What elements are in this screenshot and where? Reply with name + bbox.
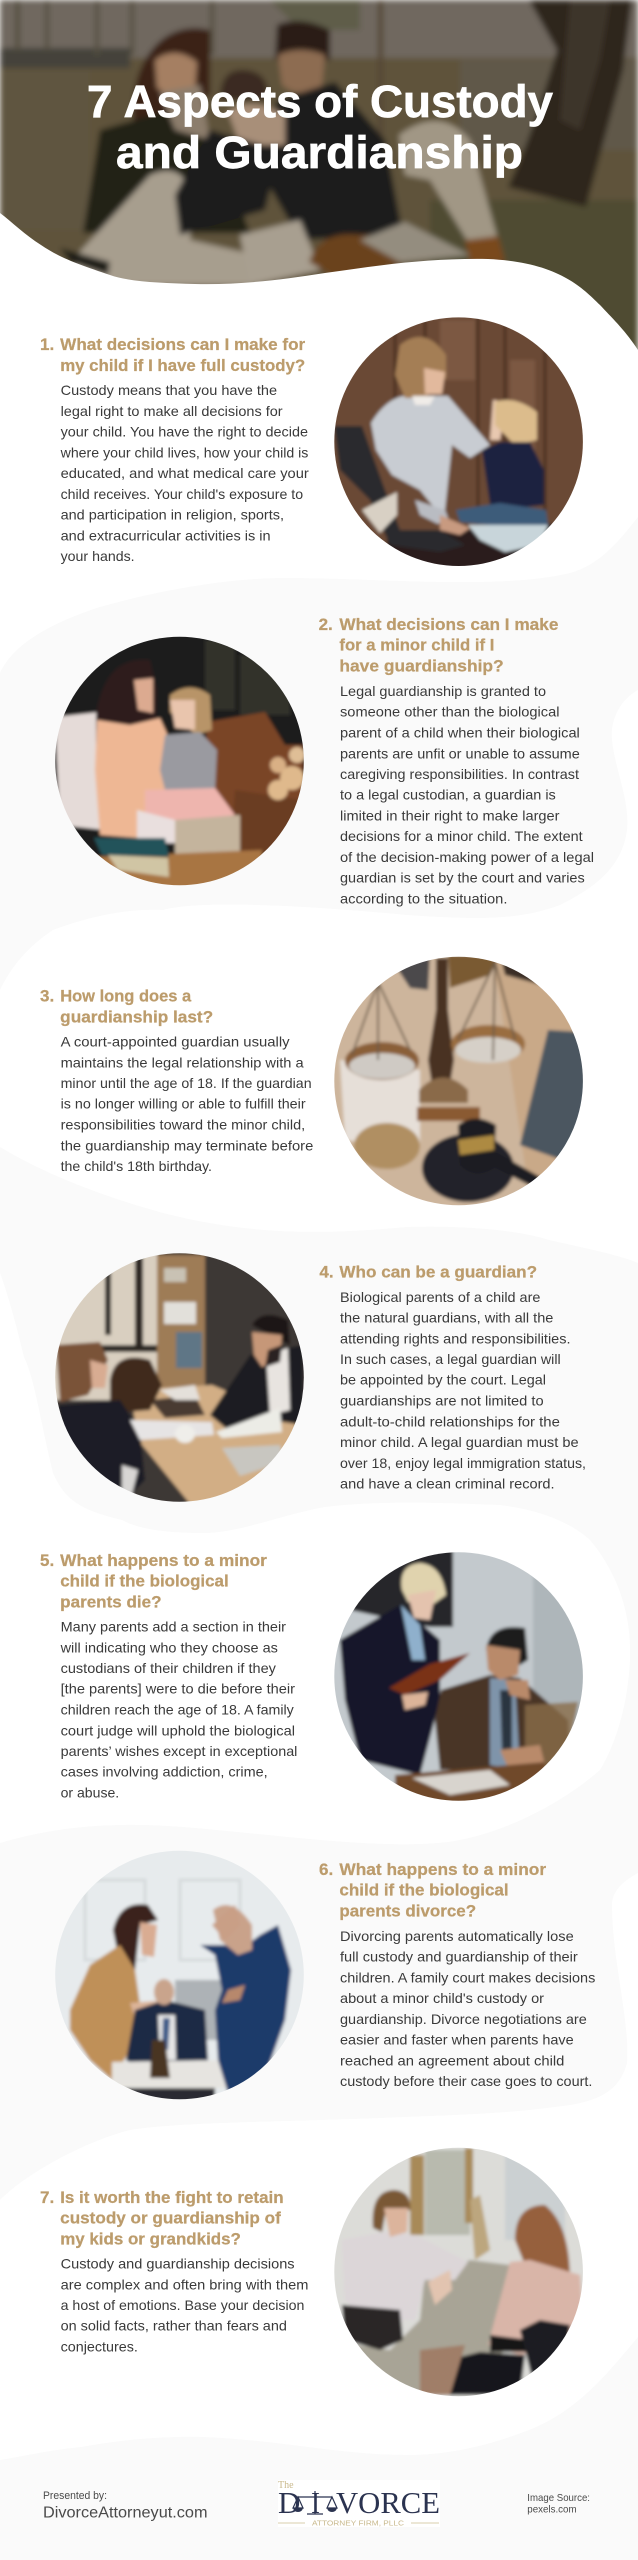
heading: question 2: What decisions can I make <box>339 615 558 634</box>
title: 7 Aspects of Custody <box>87 76 553 127</box>
logo: The Divorce Attorney Firm: The <box>278 2480 294 2491</box>
heading: question 4: Who can be a guardian? <box>339 1262 537 1281</box>
text block: answer 4: In such cases, a legal guardian will <box>340 1351 561 1367</box>
panel: question 1 <box>40 315 586 571</box>
text block: answer 1: and extracurricular activities is in <box>61 527 271 543</box>
photo: lawyer taking notes beside seated client <box>330 1548 590 1808</box>
text block: answer 6 <box>340 1928 595 2089</box>
footer: image source: Image Source: <box>527 2492 590 2504</box>
text block: answer 3: maintains the legal relationship with a <box>61 1054 304 1070</box>
heading: question 3: How long does a <box>60 987 192 1006</box>
text block: answer 2 <box>340 683 594 906</box>
heading: question 7: 7. <box>40 2188 54 2207</box>
footer: image source <box>527 2492 590 2516</box>
panel: question 7 <box>40 2143 590 2403</box>
heading: question 6: parents divorce? <box>339 1901 476 1920</box>
text block: answer 3: responsibilities toward the minor child, <box>61 1116 305 1132</box>
text block: answer 1: legal right to make all decisions for <box>61 403 283 419</box>
text block: answer 4: minor child. A legal guardian must be <box>340 1434 579 1450</box>
text block: answer 3: is no longer willing or able to fulfill their <box>61 1096 306 1112</box>
text block: answer 7 <box>61 2256 308 2354</box>
text block: answer 6: custody before their case goes to court. <box>340 2073 592 2089</box>
text block: answer 6: about a minor child's custody or <box>340 1990 544 2006</box>
text block: answer 1: your hands. <box>61 548 135 564</box>
panel: question 4 <box>50 1250 586 1510</box>
footer: presented by <box>43 2490 208 2521</box>
text block: answer 2: of the decision-making power of a legal <box>340 849 594 865</box>
text block: answer 3 <box>61 1034 314 1174</box>
heading: question 7 <box>40 2188 284 2248</box>
heading: question 2: have guardianship? <box>339 657 504 676</box>
text block: answer 5: parents’ wishes except in exceptional <box>61 1743 297 1759</box>
text block: answer 2: guardian is set by the court and varies <box>340 870 585 886</box>
text block: answer 1: educated, and what medical care your <box>61 465 309 481</box>
text block: answer 4 <box>340 1289 586 1491</box>
text block: answer 6: full custody and guardianship of their <box>340 1949 578 1965</box>
text block: answer 3: A court-appointed guardian usually <box>61 1034 290 1050</box>
text block: answer 7: Custody and guardianship decisions <box>61 2256 295 2272</box>
heading: question 2: for a minor child if I <box>339 636 494 655</box>
text block: answer 4: guardianships are not limited to <box>340 1393 544 1409</box>
footer: image source: pexels.com <box>527 2504 577 2516</box>
title <box>87 76 553 178</box>
heading: question 6: What happens to a minor <box>339 1860 546 1879</box>
photo: arguing couple before a lawyer <box>50 1846 310 2106</box>
heading: question 6 <box>319 1860 546 1920</box>
text block: answer 5: court judge will uphold the biological <box>61 1722 295 1738</box>
text block: answer 7: a host of emotions. Base your decision <box>61 2297 304 2313</box>
logo: The Divorce Attorney Firm: D <box>278 2485 300 2520</box>
text block: answer 5: custodians of their children if they <box>61 1660 276 1676</box>
heading: question 5: What happens to a minor <box>60 1551 267 1570</box>
text block: answer 2: Legal guardianship is granted to <box>340 683 546 699</box>
footer: presented by: Presented by: <box>43 2490 107 2502</box>
heading: question 7: my kids or grandkids? <box>60 2229 241 2248</box>
text block: answer 6: guardianship. Divorce negotiations are <box>340 2011 587 2027</box>
text block: answer 6: Divorcing parents automatically lose <box>340 1928 574 1944</box>
text block: answer 2: decisions for a minor child. The extent <box>340 828 583 844</box>
heading: question 3 <box>40 987 213 1026</box>
heading: question 7: Is it worth the fight to retain <box>60 2188 284 2207</box>
heading: question 5 <box>40 1551 267 1611</box>
heading: question 1: my child if I have full custody? <box>60 356 305 375</box>
text block: answer 5: or abuse. <box>61 1784 119 1800</box>
text block: answer 2: limited in their right to make larger <box>340 807 560 823</box>
heading: question 6: child if the biological <box>339 1881 509 1900</box>
text block: answer 2: to a legal custodian, a guardian is <box>340 787 556 803</box>
panel: question 2 <box>50 615 594 906</box>
panel: question 6 <box>50 1846 595 2106</box>
text block: answer 4: be appointed by the court. Legal <box>340 1372 546 1388</box>
text block: answer 5: children reach the age of 18. A family <box>61 1701 294 1717</box>
text block: answer 5: [the parents] were to die before their <box>61 1681 295 1697</box>
text block: answer 2: someone other than the biological <box>340 704 560 720</box>
panel: question 5 <box>40 1548 590 1808</box>
heading: question 5: parents die? <box>60 1592 162 1611</box>
heading: question 4: 4. <box>319 1262 334 1281</box>
text block: answer 1: where your child lives, how your child is <box>60 444 308 460</box>
logo: The Divorce Attorney Firm: ATTORNEY FIRM, PLLC <box>312 2520 404 2528</box>
text block: answer 1 <box>60 382 309 564</box>
heading: question 5: child if the biological <box>60 1572 229 1591</box>
text block: answer 2: parent of a child when their biological <box>340 724 580 740</box>
text block: answer 2: caregiving responsibilities. In contrast <box>340 766 579 782</box>
photo: couple meeting with attorney <box>50 1250 310 1510</box>
text block: answer 4: the natural guardians, with all the <box>340 1310 554 1326</box>
text block: answer 6: easier and faster when parents have <box>340 2032 574 2048</box>
heading: question 7: custody or guardianship of <box>60 2209 281 2228</box>
text block: answer 4: and have a clean criminal record. <box>340 1475 555 1491</box>
text block: answer 2: according to the situation. <box>340 890 507 906</box>
text block: answer 6: children. A family court makes decisions <box>340 1969 595 1985</box>
text block: answer 5 <box>60 1619 297 1800</box>
text block: answer 7: on solid facts, rather than fears and <box>61 2318 287 2334</box>
heading: question 3: guardianship last? <box>60 1007 213 1026</box>
text block: answer 5: Many parents add a section in their <box>61 1619 286 1635</box>
text block: answer 3: minor until the age of 18. If the guardian <box>61 1075 312 1091</box>
heading: question 2: 2. <box>319 615 333 634</box>
text block: answer 1: your child. You have the right to decide <box>61 424 308 440</box>
text block: answer 1: child receives. Your child's exposure to <box>61 486 303 502</box>
heading: question 6: 6. <box>319 1860 333 1879</box>
photo: mother and toddler on wood floor <box>330 315 586 571</box>
heading: question 2 <box>319 615 558 676</box>
text block: answer 4: attending rights and responsibilities. <box>340 1330 570 1346</box>
heading: question 1: 1. <box>40 335 54 354</box>
heading: question 3: 3. <box>40 987 54 1006</box>
text block: answer 6: reached an agreement about child <box>340 2052 564 2068</box>
text block: answer 3: the guardianship may terminate before <box>61 1137 314 1153</box>
heading: question 1 <box>40 335 306 375</box>
text block: answer 1: and participation in religion, sports, <box>61 507 284 523</box>
text block: answer 4: Biological parents of a child are <box>340 1289 541 1305</box>
text block: answer 5: cases involving addiction, crime, <box>61 1764 268 1780</box>
text block: answer 4: over 18, enjoy legal immigration status, <box>340 1455 586 1471</box>
logo: The Divorce Attorney Firm: VORCE <box>336 2485 440 2520</box>
heading: question 5: 5. <box>40 1551 54 1570</box>
text block: answer 5: will indicating who they choose as <box>60 1639 278 1655</box>
text block: answer 3: the child's 18th birthday. <box>61 1158 212 1174</box>
photo: mother holding daughter on leather sofa <box>50 632 310 892</box>
photo: man and woman talking on a sofa <box>330 2143 590 2403</box>
heading: question 1: What decisions can I make for <box>60 335 306 354</box>
text block: answer 7: conjectures. <box>61 2338 138 2354</box>
text block: answer 2: parents are unfit or unable to assume <box>340 745 580 761</box>
logo: The Divorce Attorney Firm: I <box>311 2485 320 2520</box>
title: and Guardianship <box>116 127 523 178</box>
hero photo: family on the grass <box>0 0 638 360</box>
footer: presented by: DivorceAttorneyut.com <box>43 2504 208 2521</box>
photo: scales of justice and gavel <box>330 952 590 1212</box>
text block: answer 7: are complex and often bring with them <box>61 2276 308 2292</box>
logo: The Divorce Attorney Firm <box>278 2480 440 2528</box>
text block: answer 4: adult-to-child relationships for the <box>340 1413 560 1429</box>
text block: answer 1: Custody means that you have the <box>61 382 277 398</box>
panel: question 3 <box>40 952 590 1212</box>
